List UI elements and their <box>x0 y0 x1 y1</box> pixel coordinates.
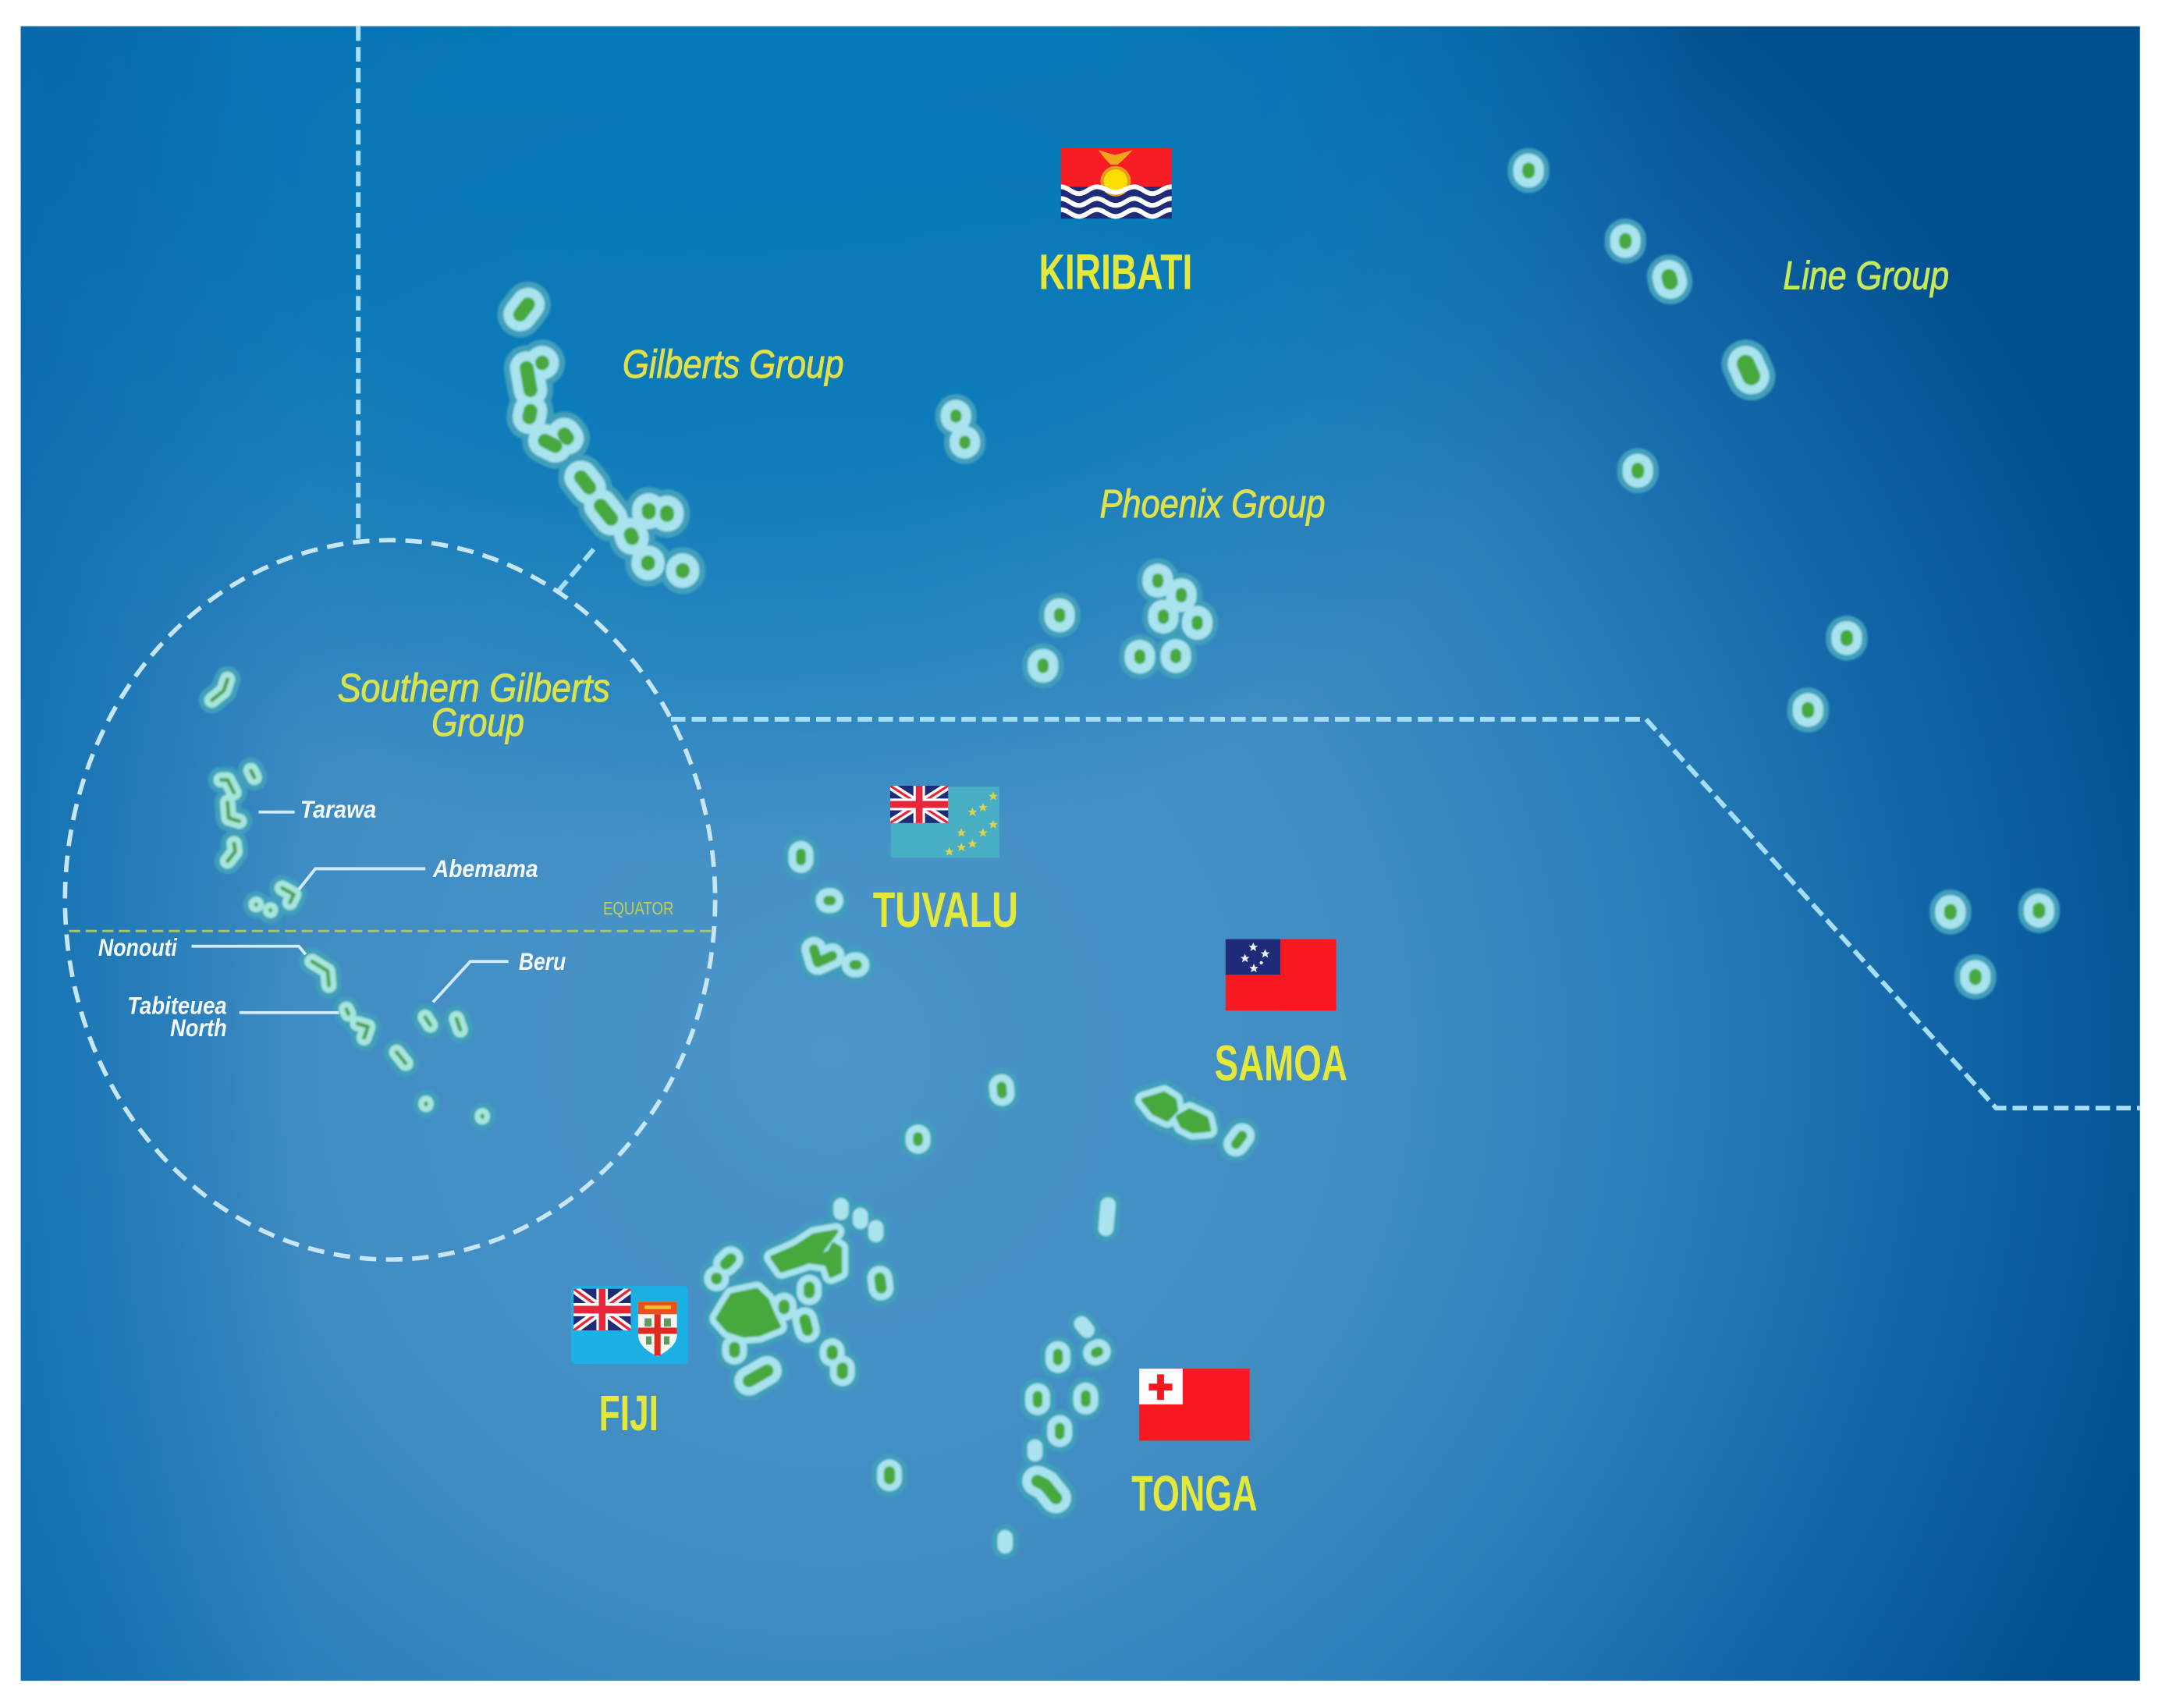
inset heading: Southern Gilberts Group: Southern Gilberts <box>338 665 610 710</box>
label: Tabiteuea North <box>127 992 339 1042</box>
islands: Samoa <box>918 1087 1242 1144</box>
flag: Fiji <box>571 1286 688 1364</box>
islands: central pair <box>956 415 965 443</box>
label: Abemama: Abemama <box>432 854 538 882</box>
label: Tarawa: Tarawa <box>300 795 376 823</box>
country label: Samoa: SAMOA <box>1215 1035 1347 1092</box>
country label: Tonga: TONGA <box>1131 1465 1258 1522</box>
label: Tabiteuea North: North <box>170 1014 227 1042</box>
label: Beru <box>433 947 566 1002</box>
label: Equator: EQUATOR <box>603 898 673 918</box>
group label: Gilberts Group: Gilberts Group <box>623 341 844 386</box>
label: Beru: Beru <box>519 947 566 975</box>
flag: Samoa <box>1226 939 1337 1010</box>
flag: Tuvalu <box>890 786 999 858</box>
islands: Phoenix Group <box>1043 579 1197 667</box>
country label: Tuvalu: TUVALU <box>873 882 1018 938</box>
flag: Kiribati <box>1061 147 1172 218</box>
group label: Phoenix Group: Phoenix Group <box>1100 481 1325 526</box>
islands: Southern Gilberts inset <box>212 679 482 1117</box>
maritime boundary lines <box>358 27 2140 1108</box>
group label: Line Group: Line Group <box>1783 253 1949 298</box>
islands: Gilberts Group <box>520 304 683 571</box>
flag: Tonga <box>1139 1369 1250 1440</box>
inset heading: Southern Gilberts Group: Group <box>431 699 524 744</box>
inset circle: Southern Gilberts <box>65 540 715 1259</box>
label: Abemama <box>299 854 538 890</box>
islands: Tuvalu <box>801 854 857 965</box>
label: Tabiteuea North: Tabiteuea <box>127 992 227 1020</box>
inset heading: Southern Gilberts Group <box>338 665 610 744</box>
equator line <box>69 930 715 932</box>
country label: Kiribati: KIRIBATI <box>1038 244 1192 300</box>
islands: Fiji and Tonga <box>716 1205 1108 1546</box>
islands: Line Group <box>1528 169 2039 978</box>
label: Nonouti <box>98 933 306 961</box>
country label: Fiji: FIJI <box>599 1385 659 1441</box>
label: Nonouti: Nonouti <box>98 933 178 961</box>
